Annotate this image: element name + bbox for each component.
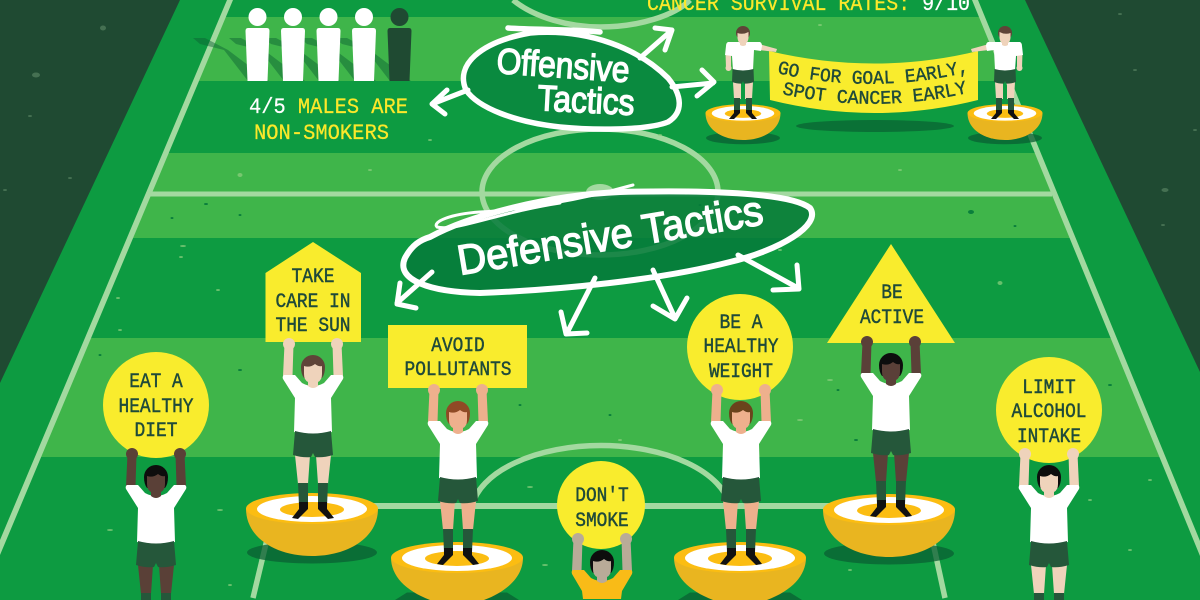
player: banner left xyxy=(725,26,777,119)
base: be a healthy weight xyxy=(674,542,806,600)
icon row: 4 of 5 males are non-smokers xyxy=(193,8,412,81)
player: eat a healthy diet: DIET xyxy=(134,420,178,443)
player: don't smoke xyxy=(557,461,645,599)
player: be a healthy weight: WEIGHT xyxy=(709,361,773,384)
banner: go for goal early: SPOT CANCER EARLY xyxy=(783,80,965,104)
player: be a healthy weight: HEALTHY xyxy=(704,336,778,359)
player: take care in the sun: CARE IN xyxy=(276,291,350,314)
player: be active: BE xyxy=(881,282,903,305)
arrow: defensive 2 xyxy=(561,278,595,334)
arrow: defensive 1 xyxy=(397,272,432,308)
base: avoid pollutants xyxy=(391,542,523,600)
player: take care in the sun xyxy=(266,242,361,519)
player: take care in the sun: THE SUN xyxy=(276,315,350,338)
player: limit alcohol intake: ALCOHOL xyxy=(1012,401,1086,424)
player: avoid pollutants: POLLUTANTS xyxy=(404,359,512,382)
player: eat a healthy diet: EAT A xyxy=(129,371,183,394)
player: take care in the sun: TAKE xyxy=(292,266,334,289)
player: be active: ACTIVE xyxy=(860,307,924,330)
player: be a healthy weight: BE A xyxy=(720,312,762,335)
stat: 4/5 males are non-smokers xyxy=(249,95,408,146)
bubble: defensive tactics: Defensive Tactics xyxy=(454,187,766,284)
base: banner right xyxy=(968,104,1042,144)
banner: go for goal early: GO FOR GOAL EARLY, xyxy=(778,62,964,84)
banner: go for goal early xyxy=(769,51,978,113)
player: avoid pollutants: AVOID xyxy=(431,335,485,358)
banner shadow xyxy=(796,120,954,132)
player: don't smoke: DON'T xyxy=(575,485,629,508)
player: be a healthy weight xyxy=(687,294,793,565)
arrow: offensive up right xyxy=(640,28,672,58)
player: banner right xyxy=(971,26,1023,119)
player: limit alcohol intake: LIMIT xyxy=(1022,377,1076,400)
bubble: offensive tactics: Offensive xyxy=(495,40,631,90)
arrow: offensive right xyxy=(672,70,714,96)
base: be active xyxy=(823,494,955,564)
arrow: defensive 3 xyxy=(653,270,687,319)
bubble: offensive tactics xyxy=(463,28,679,129)
base: take care in the sun xyxy=(246,493,378,564)
player: eat a healthy diet: HEALTHY xyxy=(118,396,194,419)
player: be active xyxy=(827,244,955,517)
player: don't smoke: SMOKE xyxy=(575,510,629,533)
player: avoid pollutants xyxy=(388,325,527,565)
base: banner left xyxy=(706,104,780,144)
bubble: offensive tactics: Tactics xyxy=(537,77,636,123)
player: limit alcohol intake xyxy=(996,357,1102,600)
player: limit alcohol intake: INTAKE xyxy=(1017,426,1081,449)
arrow: offensive left xyxy=(432,90,468,114)
arrow: defensive 4 xyxy=(738,255,799,290)
player: eat a healthy diet xyxy=(103,352,209,600)
stat: 4/5 males are non-smokers: NON-SMOKERS xyxy=(254,121,389,146)
stat: 4/5 males are non-smokers: 4/5 MALES ARE xyxy=(249,95,408,120)
